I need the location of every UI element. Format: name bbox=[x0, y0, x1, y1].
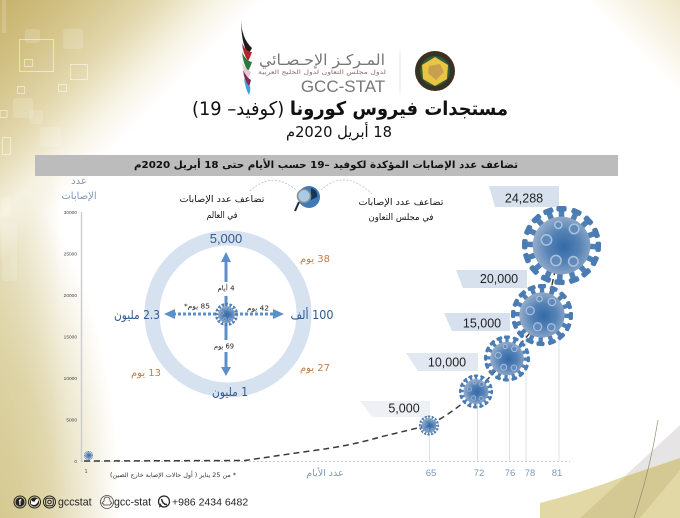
phone number: +986 2434 6482 bbox=[172, 496, 248, 508]
y axis bbox=[64, 210, 82, 465]
decorative squares bbox=[0, 0, 88, 281]
icon: twitter bbox=[28, 496, 40, 508]
x axis: 78 bbox=[525, 468, 535, 479]
title: مستجدات فيروس كورونا (كوفيد– 19) bbox=[192, 98, 508, 120]
x axis title: عدد الأيام bbox=[306, 467, 344, 479]
virus: 5,000 bbox=[419, 416, 439, 436]
value label: 20,000: 20,000 bbox=[480, 272, 518, 286]
ring labels: 1 مليون bbox=[212, 385, 248, 400]
y axis: 0 bbox=[74, 459, 77, 465]
ring labels: 5,000 bbox=[210, 231, 242, 246]
y axis: 5000 bbox=[66, 418, 77, 424]
value label: 20,000 bbox=[456, 270, 527, 288]
duration labels bbox=[131, 254, 330, 379]
icon: facebook: f bbox=[19, 498, 22, 507]
value label: 24,288 bbox=[489, 186, 559, 207]
x axis: 76 bbox=[505, 468, 515, 479]
footer: social media bbox=[14, 496, 248, 508]
value label: 5,000 bbox=[360, 401, 430, 417]
logo Arabic subtitle: لدول مجلس التعاون لدول الخليج العربية bbox=[258, 69, 386, 76]
x axis: 65 bbox=[426, 468, 436, 479]
growth curve bbox=[84, 245, 560, 461]
world heading bbox=[180, 195, 265, 221]
x axis: 81 bbox=[552, 468, 562, 479]
heading bar: تضاعف عدد الإصابات المؤكدة لكوفيد –19 حسب الأيام حتى 18 أبريل 2020م bbox=[134, 158, 518, 171]
logo: GCC-STAT bbox=[241, 18, 455, 96]
value label: 5,000: 5,000 bbox=[388, 402, 420, 416]
value label: 24,288: 24,288 bbox=[505, 192, 543, 206]
ring labels: 100 ألف bbox=[290, 307, 334, 322]
virus: center bbox=[215, 303, 238, 326]
arrow day labels: 85 يوم* bbox=[184, 302, 210, 310]
vertical drop lines bbox=[430, 250, 559, 461]
dotted arcs bbox=[250, 180, 372, 194]
virus: 24,288 bbox=[522, 206, 601, 285]
x axis: 1 bbox=[85, 469, 88, 475]
arrow right bbox=[235, 309, 284, 319]
icon: whatsapp bbox=[158, 496, 170, 508]
y axis title bbox=[61, 176, 97, 202]
x axis: 72 bbox=[474, 468, 484, 479]
y axis: 10000 bbox=[64, 376, 77, 382]
handle: gcc-stat: gcc-stat bbox=[114, 496, 151, 508]
icon: facebook bbox=[14, 496, 26, 508]
icon: instagram bbox=[44, 496, 56, 508]
value label: 10,000: 10,000 bbox=[428, 356, 466, 370]
arrow day labels: 42 يوم bbox=[247, 304, 269, 312]
arrow day labels: 4 أيام bbox=[217, 284, 235, 292]
y axis: 20000 bbox=[64, 293, 77, 299]
y axis: 25000 bbox=[64, 252, 77, 258]
ring labels bbox=[114, 231, 334, 400]
ring labels: 2.3 مليون bbox=[114, 308, 160, 323]
icon: magnifying glass over globe bbox=[295, 186, 320, 211]
logo swoosh bbox=[241, 18, 252, 95]
date: 18 أبريل 2020م bbox=[286, 122, 392, 141]
arrow up bbox=[221, 252, 231, 308]
y axis title: عدد bbox=[71, 176, 87, 187]
value label: 15,000: 15,000 bbox=[463, 316, 501, 330]
x axis bbox=[81, 462, 570, 479]
corner decoration: bottom right bbox=[540, 420, 680, 518]
virus: 10,000 bbox=[459, 374, 493, 409]
virus: day 1 bbox=[84, 451, 93, 460]
y axis: 15000 bbox=[64, 334, 77, 340]
handle: gccstat: gccstat bbox=[58, 496, 92, 508]
arrow down bbox=[221, 322, 231, 376]
GCC heading bbox=[358, 198, 444, 223]
logo Arabic name: المـركـز الإحـصـائي bbox=[259, 51, 385, 70]
emblem bbox=[415, 51, 455, 91]
duration labels: 38 يوم bbox=[300, 254, 330, 265]
virus: 15,000 bbox=[484, 336, 530, 382]
logo Latin name: GCC-STAT bbox=[301, 77, 385, 96]
heading bar bbox=[35, 155, 618, 176]
duration labels: 13 يوم bbox=[131, 368, 161, 379]
value label: 15,000 bbox=[444, 313, 510, 331]
world heading: تضاعف عدد الإصابات bbox=[180, 195, 265, 205]
footnote: * من 25 يناير ( أول حالات الإصابة خارج الصين) bbox=[110, 470, 236, 479]
icon: snapchat bbox=[100, 496, 114, 508]
GCC heading: تضاعف عدد الإصابات bbox=[358, 198, 444, 208]
y axis: 30000 bbox=[64, 210, 77, 216]
value label: 10,000 bbox=[406, 353, 478, 371]
virus: 20,000 bbox=[511, 284, 573, 346]
world heading: في العالم bbox=[206, 211, 238, 221]
GCC heading: في مجلس التعاون bbox=[368, 213, 434, 223]
y axis title: الإصابات bbox=[61, 191, 97, 202]
ring bbox=[152, 238, 304, 390]
arrow day labels: 69 يوم bbox=[214, 342, 234, 350]
arrow left bbox=[164, 309, 216, 319]
duration labels: 27 يوم bbox=[300, 363, 330, 374]
arrow day labels bbox=[184, 284, 269, 350]
